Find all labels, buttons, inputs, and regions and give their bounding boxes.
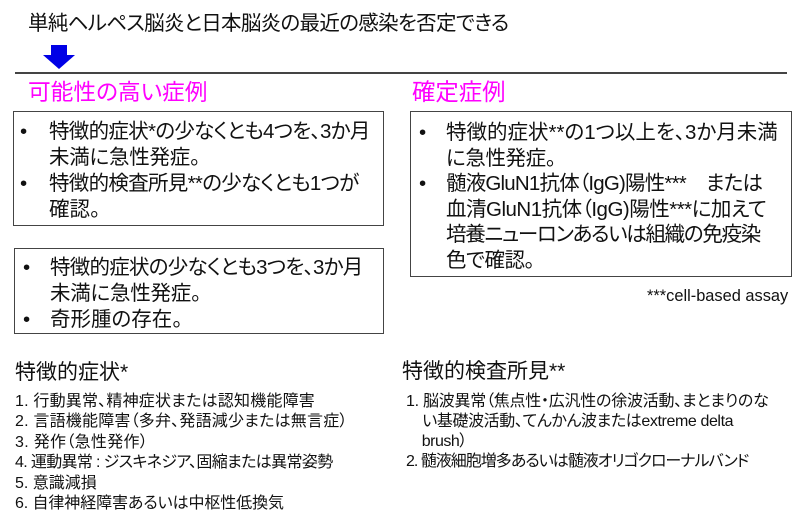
criteria A bullets: • xyxy=(20,120,27,143)
footnote: ***cell-based assay xyxy=(647,287,788,305)
criteria A text: 特徴的検査所見**の少なくとも1つが xyxy=(49,172,359,195)
heading: probable cases: 可能性の高い症例 xyxy=(28,79,207,105)
list: characteristic findings: 1. 脳波異常（焦点性・広汎性の徐波活動、まとまりのな xyxy=(406,393,769,410)
criteria A bullets xyxy=(20,120,27,195)
criteria B text: 特徴的症状の少なくとも3つを、3か月 xyxy=(50,256,362,279)
definite text xyxy=(446,121,778,272)
icon: blue down arrow xyxy=(43,45,75,69)
panel: probable criteria B xyxy=(14,248,384,334)
definite text: 特徴的症状**の1つ以上を、3か月未満 xyxy=(446,121,778,144)
heading: characteristic findings: 特徴的検査所見** xyxy=(402,360,565,383)
criteria B text: 未満に急性発症。 xyxy=(50,282,201,305)
definite text: 色で確認。 xyxy=(446,249,534,272)
list: characteristic symptoms: 4. 運動異常 : ジスキネジア、固縮または異常姿勢 xyxy=(15,454,333,471)
criteria A bullets: • xyxy=(20,172,27,195)
criteria A text: 特徴的症状*の少なくとも4つを、3か月 xyxy=(49,120,370,143)
list: characteristic symptoms: 2. 言語機能障害（多弁、発語減少または無言症） xyxy=(15,413,348,430)
heading: characteristic symptoms: 特徴的症状* xyxy=(15,361,128,384)
definite bullets xyxy=(419,121,426,195)
definite bullets: • xyxy=(419,172,426,195)
list: characteristic symptoms: 6. 自律神経障害あるいは中枢性低換気 xyxy=(15,495,284,512)
criteria B bullets: • xyxy=(23,308,30,331)
criteria B text: 奇形腫の存在。 xyxy=(50,308,183,331)
criteria A text: 確認。 xyxy=(49,198,100,221)
definite text: 培養ニューロンあるいは組織の免疫染 xyxy=(446,223,760,246)
definite text: 血清GluN1抗体（IgG)陽性***に加えて xyxy=(446,198,766,221)
title: 単純ヘルペス脳炎と日本脳炎の最近の感染を否定できる xyxy=(28,12,509,35)
panel: probable criteria A xyxy=(13,111,384,226)
criteria A text xyxy=(49,120,370,221)
list: characteristic findings: 2. 髄液細胞増多あるいは髄液オリゴクローナルバンド xyxy=(406,453,748,470)
definite text: に急性発症。 xyxy=(446,147,556,170)
criteria A text: 未満に急性発症。 xyxy=(49,146,200,169)
list: characteristic findings xyxy=(406,392,769,470)
criteria B bullets xyxy=(23,256,30,331)
list: characteristic symptoms: 3. 発作（急性発作） xyxy=(15,434,148,451)
definite text: 髄液GluN1抗体（IgG)陽性*** または xyxy=(446,172,762,195)
definite bullets: • xyxy=(419,121,426,144)
criteria B bullets: • xyxy=(23,256,30,279)
heading: definite cases: 確定症例 xyxy=(412,79,506,105)
list: characteristic findings: brush） xyxy=(422,433,467,450)
panel: definite criteria xyxy=(410,111,792,277)
divider line xyxy=(15,72,787,74)
list: characteristic symptoms: 1. 行動異常、精神症状または認知機能障害 xyxy=(15,393,315,410)
criteria B text xyxy=(50,256,362,331)
list: characteristic findings: い基礎波活動、てんかん波またはextreme delta xyxy=(422,413,733,430)
list: characteristic symptoms: 5. 意識減損 xyxy=(15,475,97,492)
list: characteristic symptoms xyxy=(15,392,348,512)
